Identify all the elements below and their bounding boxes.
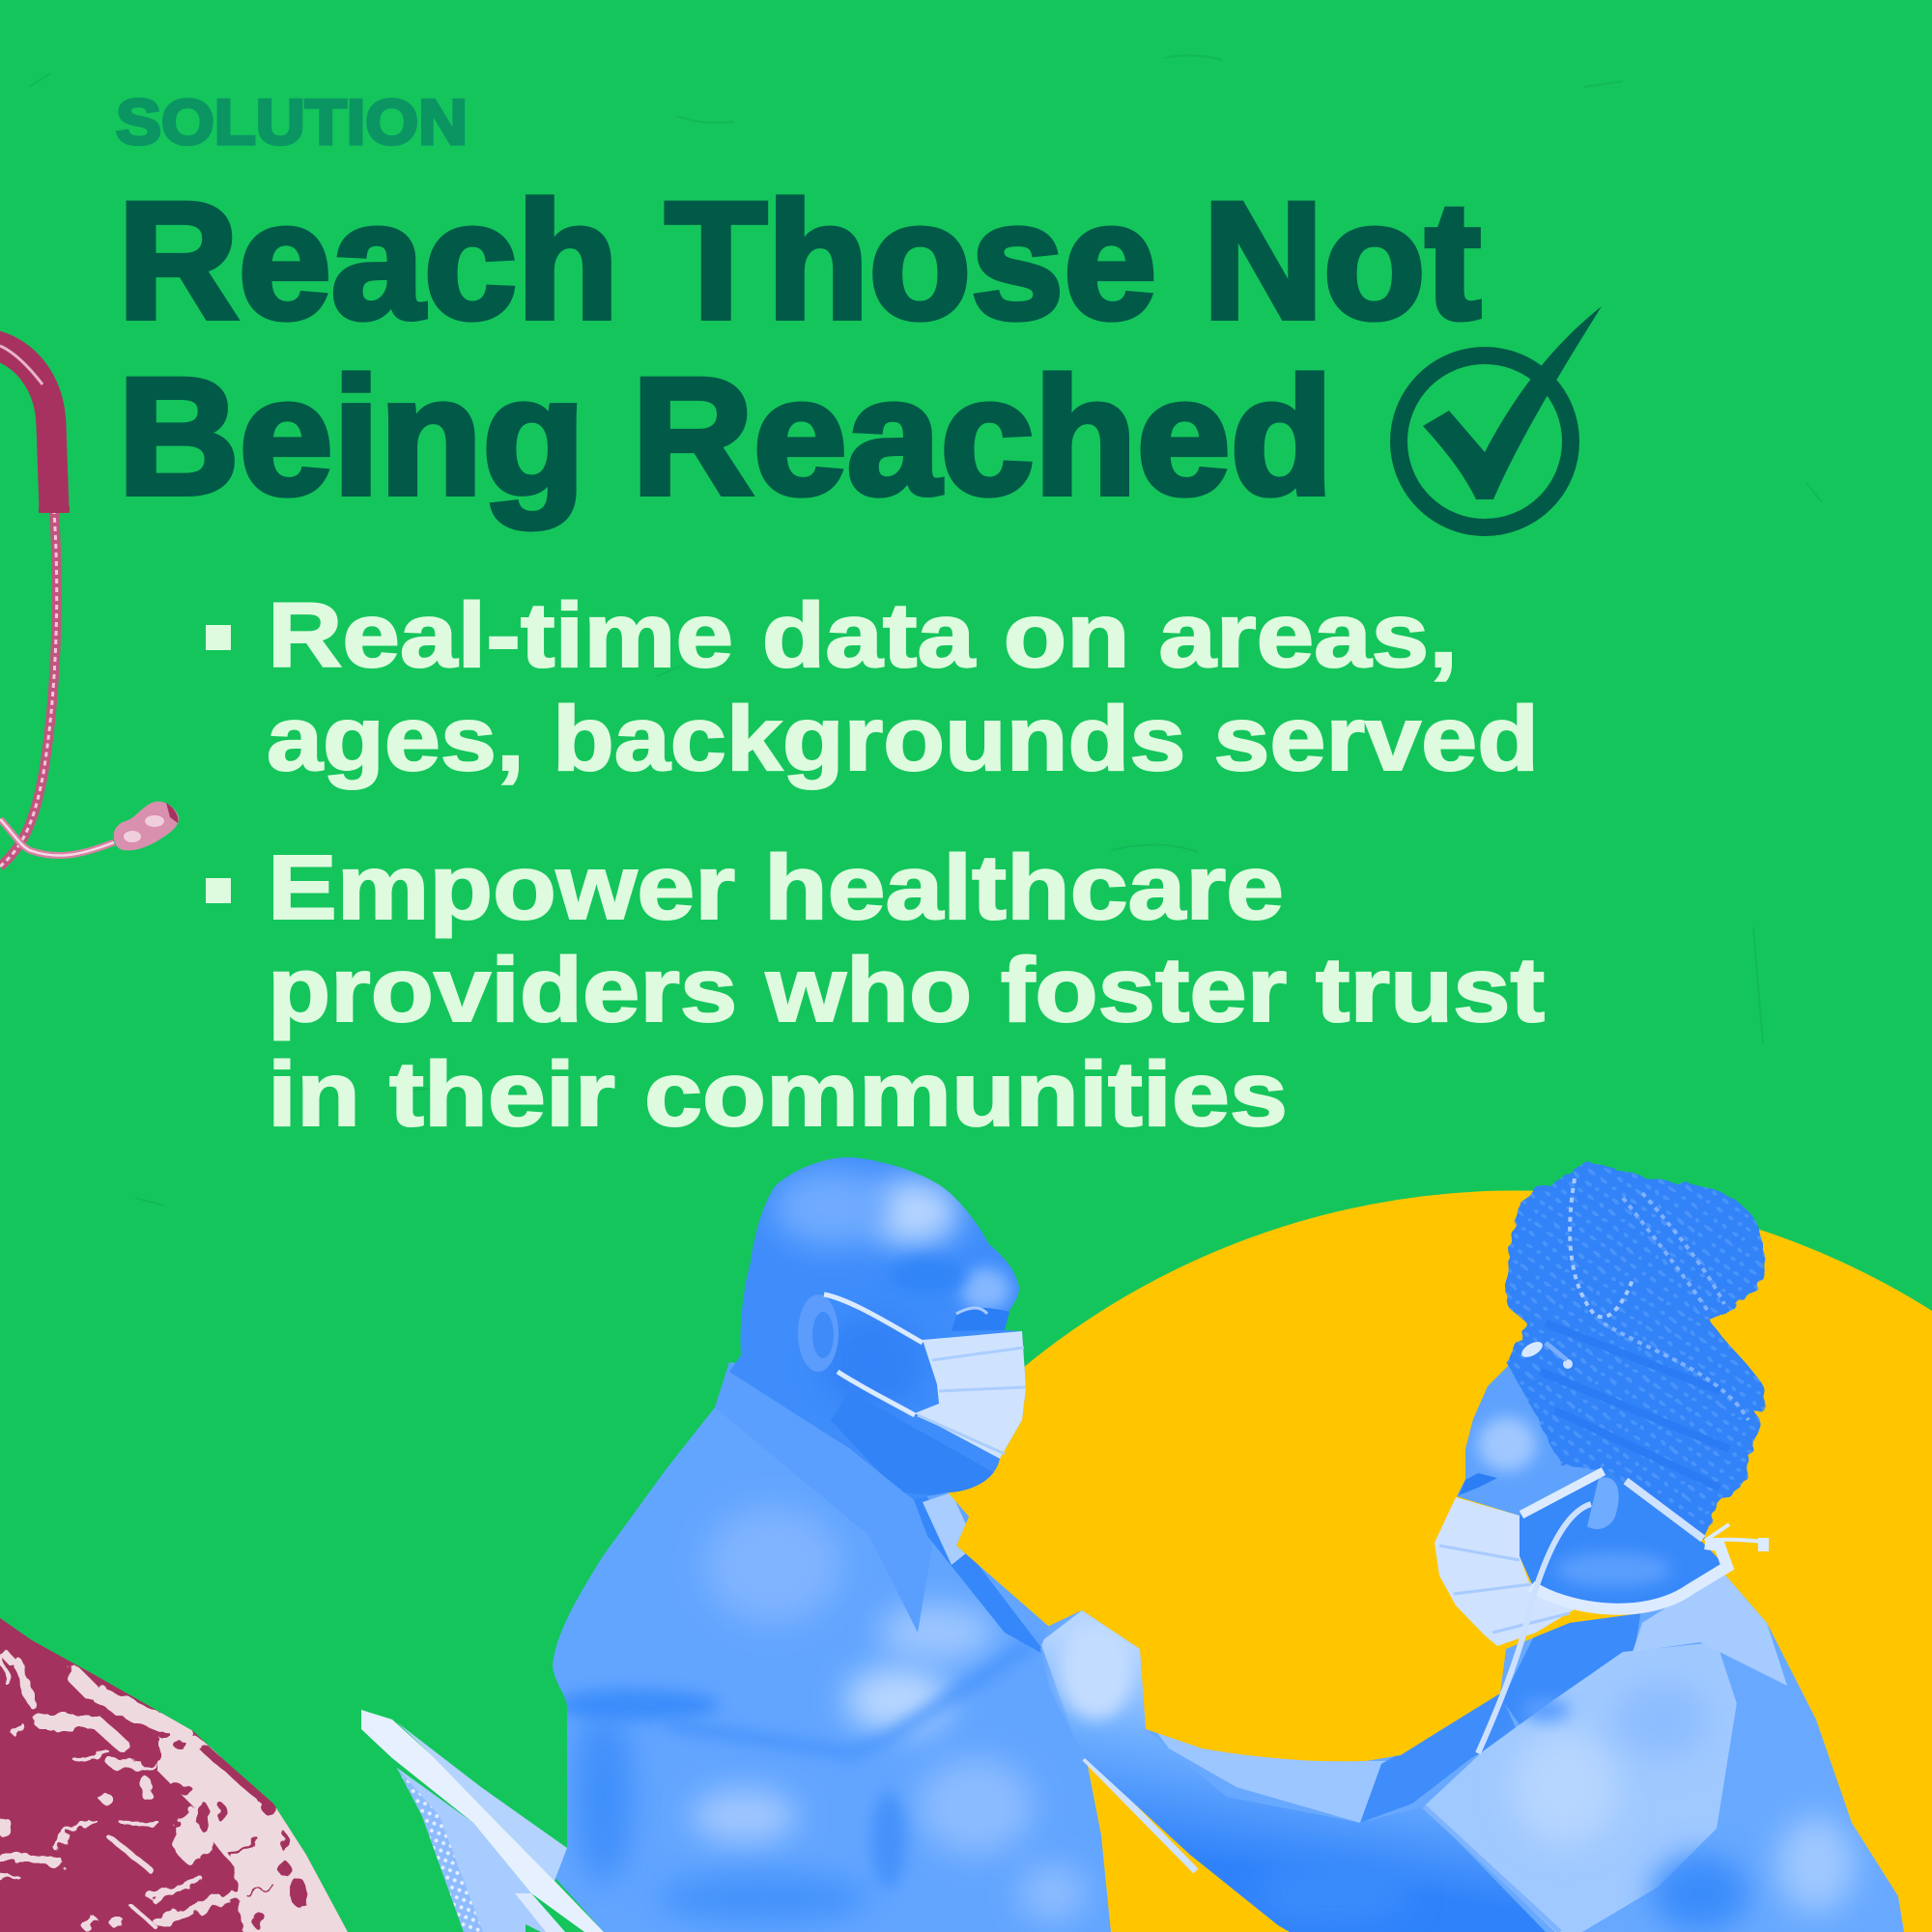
bullet 1: Real-time data on areas,: [268, 584, 1458, 687]
yellow circle: [741, 1190, 1932, 1932]
chair: [361, 1710, 604, 1932]
man: face mask: [824, 1294, 1026, 1459]
nurse: body and arms: [1024, 1565, 1922, 1932]
title: Reach Those Not: [118, 168, 1481, 354]
title: Being Reached: [118, 344, 1333, 529]
bullet 2: in their communities: [268, 1043, 1288, 1146]
nurse: front arm: [1040, 1610, 1546, 1932]
nurse: hair clip: [1520, 1339, 1573, 1369]
nurse: sleeve: [1424, 1642, 1739, 1932]
nurse: cheek and face: [1457, 1352, 1604, 1516]
maroon textured rock: [0, 1613, 357, 1932]
title: [118, 168, 1481, 529]
bullet 2: Empower healthcare: [268, 837, 1284, 939]
nurse: face mask: [1435, 1471, 1769, 1646]
label: SOLUTION: SOLUTION: [116, 86, 468, 157]
man: shirt: [541, 1352, 1121, 1932]
nurse: hair: [1506, 1165, 1767, 1539]
nurse: torso: [1690, 1703, 1904, 1932]
bullet 1: [206, 584, 1539, 790]
icon: check mark in circle: [1399, 306, 1602, 527]
bullet 2: providers who foster trust: [268, 939, 1545, 1041]
man: eye: [952, 1308, 1009, 1331]
stethoscope: [0, 345, 179, 867]
bullet list: [206, 584, 1545, 1146]
man: ear: [798, 1294, 838, 1372]
nurse: neck: [1503, 1613, 1640, 1725]
nurse: stethoscope tube: [1478, 1504, 1591, 1753]
bullet 1: ages, backgrounds served: [267, 688, 1539, 790]
man: head: [729, 1157, 1026, 1499]
bullet 2: [206, 837, 1545, 1146]
nurse: back arm: [1140, 1710, 1389, 1823]
man: [541, 1150, 1121, 1932]
nurse: [1024, 1165, 1922, 1932]
nurse: stethoscope strip: [1085, 1758, 1196, 1871]
nurse: ear: [1587, 1477, 1619, 1529]
nurse: back sleeve: [1360, 1693, 1518, 1823]
